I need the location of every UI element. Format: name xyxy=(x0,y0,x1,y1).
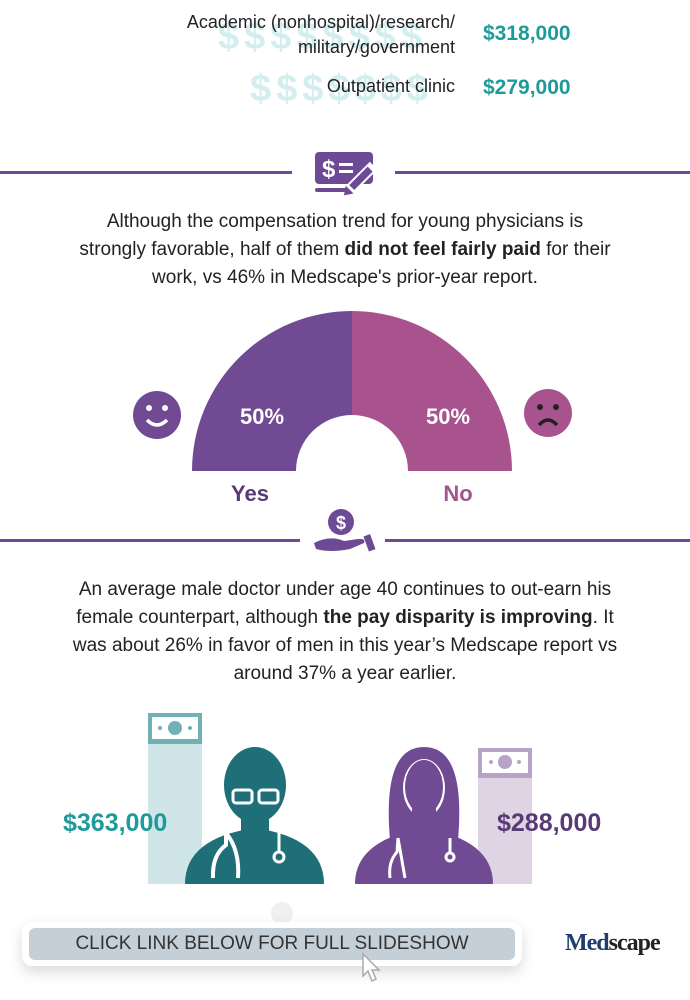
icon: hand with coin: $ xyxy=(336,513,346,533)
icon: cursor xyxy=(362,952,381,982)
divider with icon xyxy=(0,152,690,196)
button: click link xyxy=(22,922,522,966)
icon: smiley xyxy=(133,391,181,439)
button: click link: CLICK LINK BELOW FOR FULL SLIDESHOW xyxy=(75,933,469,954)
text block: fair pay: strongly favorable, half of them did not feel fairly paid for their xyxy=(79,239,611,260)
value: outpatient: $279,000 xyxy=(483,76,571,99)
decorative circle xyxy=(271,902,293,924)
icon: check writing xyxy=(315,152,373,196)
icon: hand with coin xyxy=(314,509,376,552)
background dollar signs: $$$$$$$$ xyxy=(218,16,427,58)
text block: pay disparity: around 37% a year earlier. xyxy=(234,663,456,684)
text block: pay disparity xyxy=(72,579,617,684)
icon: frown xyxy=(524,389,572,437)
divider with hand icon xyxy=(0,509,690,552)
text block: pay disparity: An average male doctor under age 40 continues to out-earn his xyxy=(79,579,611,600)
chart: male vs female xyxy=(63,713,601,884)
value: academic: $318,000 xyxy=(483,22,571,45)
row: academic: military/government xyxy=(298,37,455,57)
logo: Medscape: Medscape xyxy=(565,930,660,956)
text block: pay disparity: was about 26% in favor of men in this year’s Medscape report vs xyxy=(73,635,617,656)
text block: fair pay xyxy=(79,211,611,288)
chart: half donut xyxy=(133,311,572,506)
row: academic: Academic (nonhospital)/research/ xyxy=(187,12,455,32)
female bar xyxy=(478,748,532,884)
chart: half donut: No xyxy=(443,481,473,506)
chart: male vs female: $363,000 xyxy=(63,809,167,837)
female doctor xyxy=(355,747,493,884)
chart: half donut: 50% xyxy=(426,404,470,429)
chart: male vs female: $288,000 xyxy=(497,809,601,837)
icon: check writing: $ xyxy=(322,156,336,183)
text block: pay disparity: female counterpart, although the pay disparity is improving. It xyxy=(76,607,614,628)
row: outpatient: Outpatient clinic xyxy=(327,76,455,96)
male bar xyxy=(148,713,202,884)
chart: half donut: Yes xyxy=(231,481,269,506)
text: $$$$$$$ xyxy=(250,68,433,110)
row: academic xyxy=(187,12,455,57)
chart: half donut: 50% xyxy=(240,404,284,429)
text block: fair pay: Although the compensation trend for young physicians is xyxy=(107,211,583,232)
text block: fair pay: work, vs 46% in Medscape's prior-year report. xyxy=(152,267,538,288)
male doctor xyxy=(185,747,324,884)
